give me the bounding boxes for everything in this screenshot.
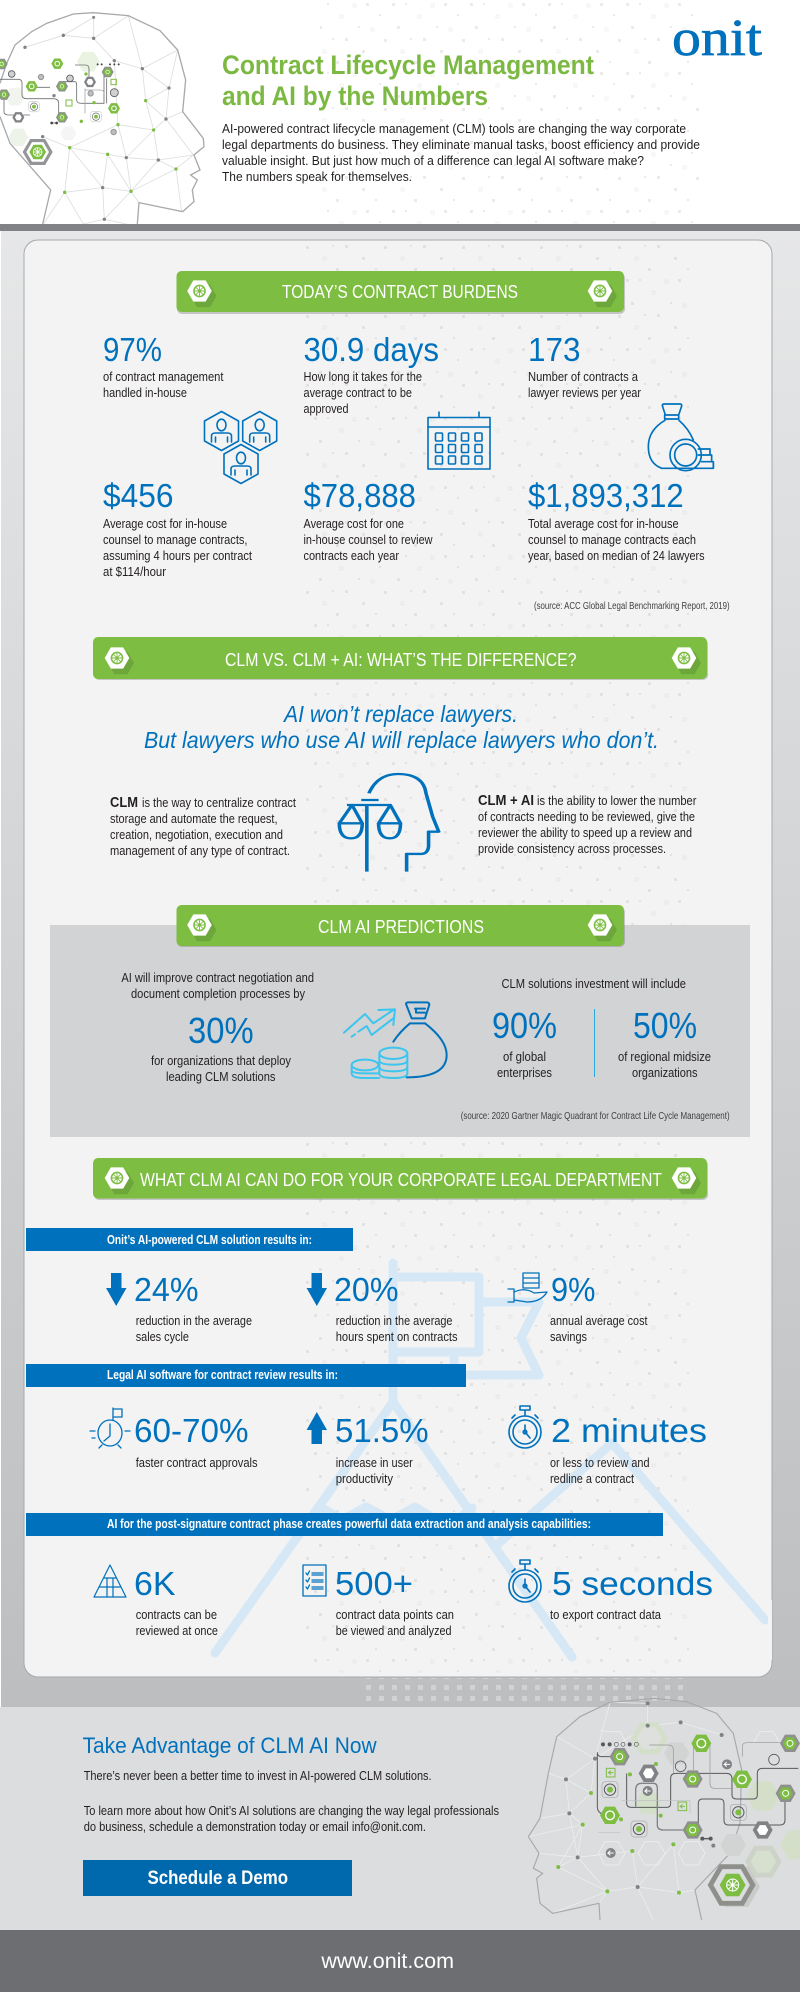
stat: 60-70% — [90, 1408, 258, 1470]
text: CLM definition: CLM — [110, 794, 138, 811]
stat: 24%: 24% — [134, 1271, 198, 1308]
banner: CLM AI predictions — [176, 905, 625, 947]
bar: post-signature phase: AI for the post-signature contract phase creates powerful data extraction and analysis capabilities: — [107, 1517, 591, 1531]
stat: $456: assuming 4 hours per contract — [103, 548, 252, 563]
main background — [1, 231, 800, 1707]
stat: 97%: of contract management — [103, 369, 224, 384]
banner: what CLM AI can do — [93, 1158, 708, 1200]
stat: 30.9 days: average contract to be — [304, 385, 412, 400]
footer bar: www.onit.com — [320, 1950, 454, 1973]
prediction: 30%: document completion processes by — [131, 986, 305, 1001]
watermark: flag and mountains — [215, 1263, 765, 1657]
text: call to action: do business, schedule a demonstration today or email info@onit.com. — [84, 1819, 426, 1834]
bar: post-signature phase — [26, 1513, 663, 1536]
stat: 30.9 days: 30.9 days — [304, 331, 439, 368]
prediction: 30% — [121, 970, 314, 1084]
text: CLM definition: management of any type of contract. — [110, 843, 290, 858]
stat: 6K: reviewed at once — [136, 1623, 218, 1638]
icon: people hexagons — [204, 412, 277, 484]
stat: 2 minutes: or less to review and — [550, 1455, 650, 1470]
stat: $456: counsel to manage contracts, — [103, 532, 248, 547]
stat: 20%: reduction in the average — [336, 1313, 452, 1328]
text: CLM + AI definition — [478, 792, 697, 856]
banner: today's contract burdens — [176, 271, 625, 314]
stat: 500+: 500+ — [335, 1565, 413, 1602]
prediction: 90% — [492, 1005, 557, 1080]
stat: 20%: 20% — [334, 1271, 398, 1308]
stat: 24% — [106, 1271, 252, 1344]
stat: $78,888: $78,888 — [304, 477, 416, 514]
stat: $456: at $114/hour — [103, 564, 167, 579]
stat: 51.5%: 51.5% — [335, 1412, 429, 1449]
button: schedule a demo — [83, 1860, 352, 1896]
banner: CLM vs. CLM + AI: CLM VS. CLM + AI: WHAT’S THE DIFFERENCE? — [225, 650, 576, 670]
title — [222, 50, 594, 111]
prediction: 30%: AI will improve contract negotiation and — [121, 970, 314, 985]
quote: But lawyers who use AI will replace lawyers who don’t. — [144, 727, 659, 753]
bar: Onit's solution: Onit’s AI-powered CLM solution results in: — [107, 1233, 312, 1247]
stat: $456: Average cost for in-house — [103, 516, 227, 531]
stat: 9%: annual average cost — [550, 1313, 648, 1328]
prediction: 90%: of global — [503, 1049, 546, 1064]
banner: CLM vs. CLM + AI — [93, 637, 708, 680]
stat: 6K: 6K — [134, 1565, 176, 1602]
intro text: AI-powered contract lifecycle management (CLM) tools are changing the way corporate — [222, 121, 686, 136]
stat: $456: $456 — [103, 477, 174, 514]
stat: 5 seconds: to export contract data — [550, 1607, 662, 1622]
text: call to action: There’s never been a better time to invest in AI-powered CLM solutions. — [84, 1768, 432, 1783]
prediction: 50%: organizations — [632, 1065, 698, 1080]
stat: 97% — [103, 331, 224, 400]
stat: 6K: contracts can be — [136, 1607, 217, 1622]
source note: ACC: (source: ACC Global Legal Benchmarking Report, 2019) — [534, 601, 730, 612]
stat: $78,888: in-house counsel to review — [304, 532, 433, 547]
prediction: 90%: 90% — [492, 1005, 557, 1046]
lower band data pattern — [360, 1678, 690, 1707]
title: Contract Lifecycle Management — [222, 50, 594, 80]
stat: 30.9 days: approved — [304, 401, 348, 416]
prediction divider — [594, 1009, 595, 1077]
stat: 2 minutes — [509, 1406, 707, 1486]
stat: 500+: contract data points can — [336, 1607, 454, 1622]
stat: $1,893,312: $1,893,312 — [528, 477, 684, 514]
stat: 51.5%: increase in user — [336, 1455, 413, 1470]
stat: $456 — [103, 477, 252, 579]
icon: money bag and coin — [648, 404, 713, 471]
panel: CLM AI predictions — [50, 925, 750, 1137]
card data pattern — [305, 245, 690, 1673]
prediction: 90%: enterprises — [497, 1065, 552, 1080]
prediction: 50% — [618, 1005, 711, 1080]
bar: Onit's solution — [26, 1228, 353, 1251]
stat: 20%: hours spent on contracts — [336, 1329, 458, 1344]
banner: what CLM AI can do: WHAT CLM AI CAN DO FOR YOUR CORPORATE LEGAL DEPARTMENT — [140, 1170, 662, 1190]
panel: call to action band — [0, 1707, 800, 1930]
stat: 24%: reduction in the average — [136, 1313, 252, 1328]
stat: 173: lawyer reviews per year — [528, 385, 642, 400]
quote: AI won’t replace lawyers. — [282, 701, 518, 727]
banner: CLM AI predictions: CLM AI PREDICTIONS — [318, 917, 484, 937]
stat: 30.9 days: How long it takes for the — [304, 369, 422, 384]
footer bar — [0, 1930, 800, 1992]
text: CLM definition: is the way to centralize contract — [142, 795, 296, 810]
stat: 2 minutes: 2 minutes — [551, 1412, 707, 1449]
bar: Legal AI software: Legal AI software for contract review results in: — [107, 1368, 338, 1382]
watermark mask at card edge — [768, 1600, 772, 1660]
stat: 60-70%: faster contract approvals — [136, 1455, 258, 1470]
stat: 9%: 9% — [551, 1271, 595, 1308]
text: CLM + AI definition: reviewer the ability to speed up a review and — [478, 825, 692, 840]
icon: growth, coins and bag — [344, 1002, 447, 1078]
intro text: legal departments do business. They eliminate manual tasks, boost efficiency and provide — [222, 137, 700, 152]
stat: 30.9 days — [304, 331, 439, 416]
illustration: AI head, header — [0, 13, 204, 224]
text: CLM definition: creation, negotiation, execution and — [110, 827, 283, 842]
prediction: 50%: 50% — [633, 1005, 697, 1046]
stat: 9%: savings — [550, 1329, 587, 1344]
text: call to action: To learn more about how Onit’s AI solutions are changing the way legal professionals — [84, 1803, 499, 1818]
logo: onit: onit — [672, 10, 763, 67]
text: CLM definition — [110, 794, 296, 858]
stat: 5 seconds: 5 seconds — [552, 1565, 713, 1602]
heading: take advantage: Take Advantage of CLM AI Now — [83, 1733, 377, 1758]
intro text: valuable insight. But just how much of a difference can legal AI software make? — [222, 153, 644, 168]
prediction: 30%: leading CLM solutions — [166, 1069, 276, 1084]
stat: 5 seconds — [509, 1560, 713, 1622]
text: CLM + AI definition: is the ability to lower the number — [537, 793, 697, 808]
intro text: The numbers speak for themselves. — [222, 169, 412, 184]
stat: 500+: be viewed and analyzed — [336, 1623, 452, 1638]
quote — [144, 701, 659, 753]
text: CLM definition: storage and automate the request, — [110, 811, 278, 826]
text: CLM + AI definition: provide consistency across processes. — [478, 841, 666, 856]
stat: $1,893,312: counsel to manage contracts each — [528, 532, 696, 547]
stat: 500+ — [303, 1565, 454, 1638]
illustration: AI head, footer — [528, 1698, 800, 1920]
stat: 60-70%: 60-70% — [134, 1412, 248, 1449]
stat: 173 — [528, 331, 642, 400]
stat: 20% — [307, 1271, 458, 1344]
text: call to action — [84, 1768, 499, 1834]
icon: head with scales — [339, 774, 439, 872]
stat: $1,893,312 — [528, 477, 705, 563]
button: schedule a demo: Schedule a Demo — [148, 1868, 288, 1889]
header divider — [0, 224, 800, 231]
stat: 24%: sales cycle — [136, 1329, 189, 1344]
stat: 6K — [94, 1565, 218, 1638]
main card — [24, 240, 772, 1677]
banner: today's contract burdens: TODAY’S CONTRACT BURDENS — [282, 282, 518, 302]
intro text — [222, 121, 700, 184]
source note: Gartner: (source: 2020 Gartner Magic Quadrant for Contract Life Cycle Management) — [461, 1111, 730, 1122]
text: CLM + AI definition: of contracts needing to be reviewed, give the — [478, 809, 695, 824]
prediction: 50%: of regional midsize — [618, 1049, 711, 1064]
stat: $78,888: contracts each year — [304, 548, 400, 563]
title: and AI by the Numbers — [222, 81, 488, 111]
stat: 173: Number of contracts a — [528, 369, 639, 384]
stat: 9% — [508, 1271, 648, 1344]
icon: calendar — [428, 412, 490, 469]
stat: $1,893,312: year, based on median of 24 lawyers — [528, 548, 705, 563]
text: CLM + AI definition: CLM + AI — [478, 792, 534, 809]
stat: 2 minutes: redline a contract — [550, 1471, 634, 1486]
stat: $78,888 — [304, 477, 433, 563]
stat: 173: 173 — [528, 331, 580, 368]
prediction: 30%: for organizations that deploy — [151, 1053, 291, 1068]
header data pattern — [320, 0, 700, 224]
text: investment heading: CLM solutions investment will include — [502, 976, 686, 991]
stat: $1,893,312: Total average cost for in-house — [528, 516, 679, 531]
bar: Legal AI software — [26, 1364, 466, 1387]
stat: 97%: handled in-house — [103, 385, 187, 400]
prediction: 30%: 30% — [188, 1010, 254, 1051]
stat: 51.5%: productivity — [336, 1471, 393, 1486]
stat: 51.5% — [307, 1412, 429, 1486]
stat: 97%: 97% — [103, 331, 162, 368]
stat: $78,888: Average cost for one — [304, 516, 404, 531]
